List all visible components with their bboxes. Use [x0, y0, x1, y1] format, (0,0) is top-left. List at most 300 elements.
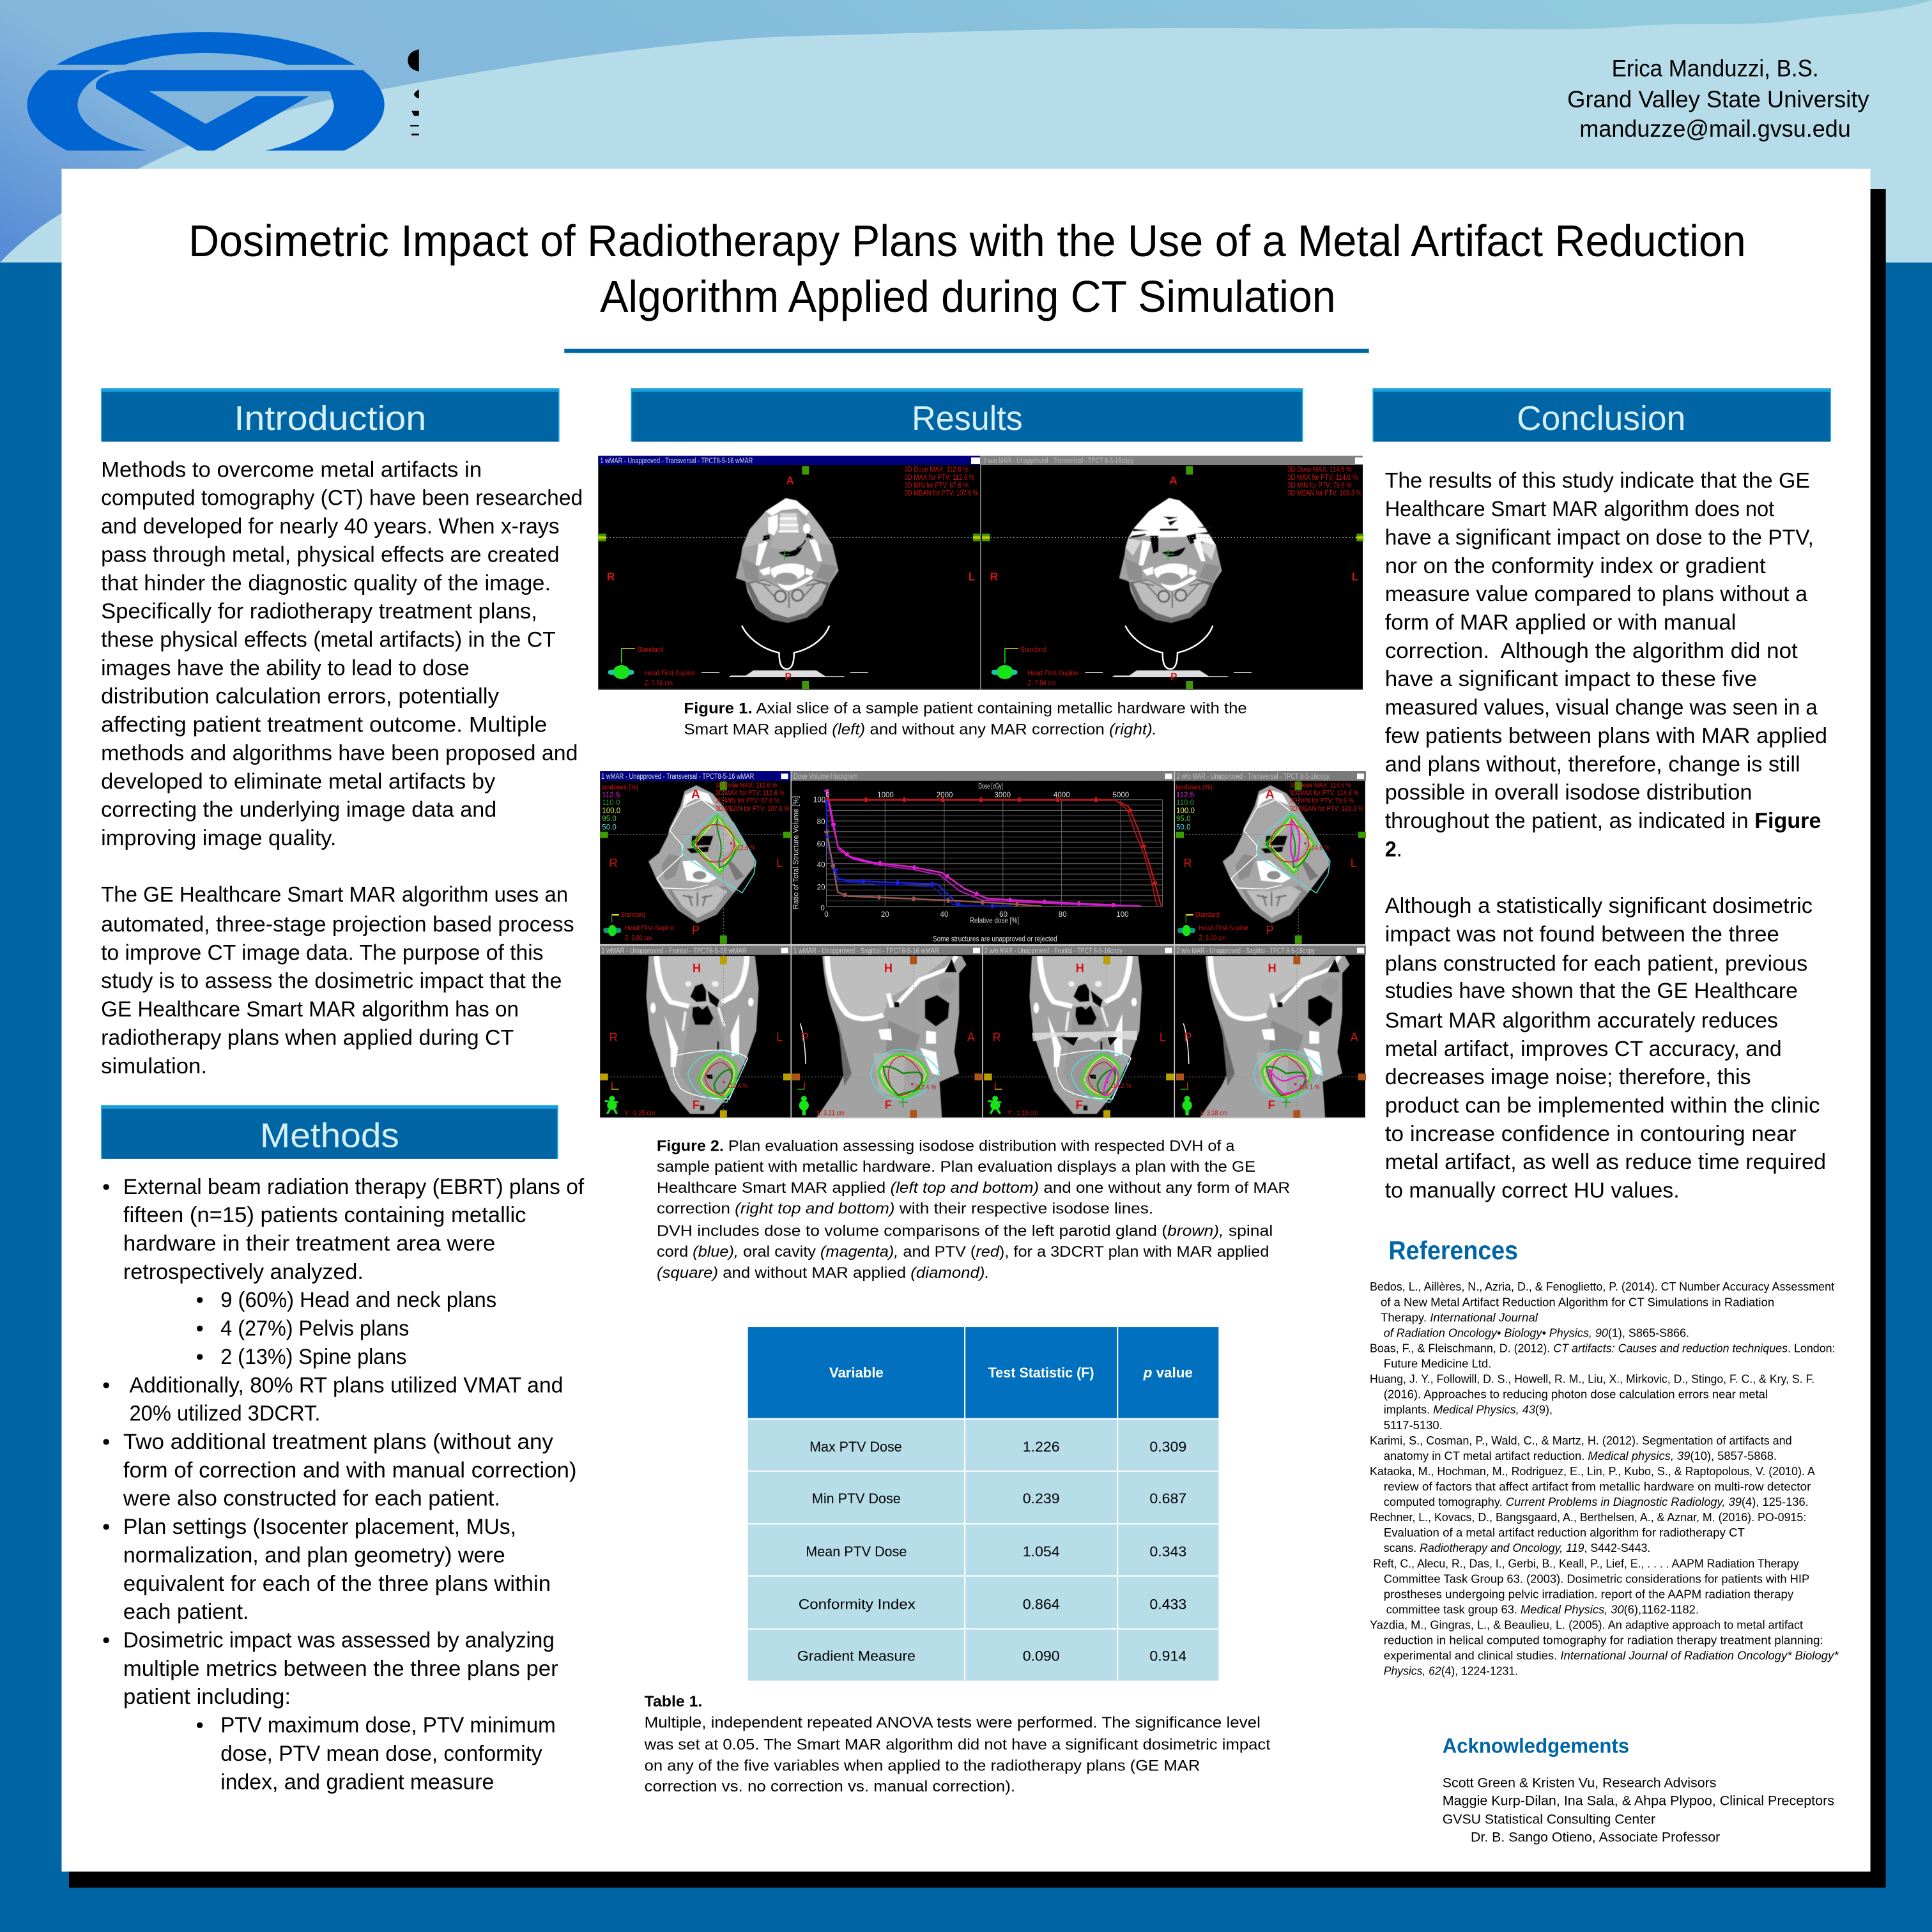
figure 2 overlay text: A [967, 1031, 976, 1044]
figure 2 title bar and axis text: 112.5 [1176, 792, 1194, 799]
heading: references: References [1389, 1236, 1518, 1265]
text block: references list: Committee Task Group 63. (2003). Dosimetric considerations for patients with HIP [1384, 1572, 1809, 1585]
text block: conclusion paragraphs: nor on the conformity index or gradient [1385, 554, 1766, 578]
figure 2 title bar and axis text: 40 [940, 911, 948, 919]
table 1: ANOVA results: Conformity Index [799, 1597, 916, 1613]
caption: figure 1: Smart MAR applied (left) and without any MAR correction (right). [684, 721, 1157, 738]
caption: figure 2: cord (blue), oral cavity (magenta), and PTV ( red), for a 3DCRT plan with MAR applied [657, 1243, 1269, 1261]
figure 2 title bar and axis text: 100 [1116, 911, 1129, 919]
text block: conclusion paragraphs: have a significant impact to these five [1385, 667, 1757, 691]
text block: references list: prostheses undergoing pelvic irradiation. report of the AAPM radiation therapy [1384, 1587, 1794, 1600]
heading: conclusion: Conclusion [1517, 399, 1685, 438]
text block: references list: experimental and clinical studies. International Journal of Radiation Oncology* Biology* [1384, 1649, 1839, 1662]
author block: Grand Valley State University [1567, 86, 1869, 112]
text block: conclusion paragraphs: metal artifact, improves CT accuracy, and [1385, 1037, 1782, 1061]
figure 2 overlay text: R [610, 1031, 618, 1044]
text block: introduction paragraphs: developed to eliminate metal artifacts by [101, 769, 496, 793]
text block: introduction paragraphs: affecting patient treatment outcome. Multiple [101, 713, 547, 737]
table 1: ANOVA results: 0.343 [1149, 1544, 1186, 1560]
text block: introduction paragraphs: and developed for nearly 40 years. When x-rays [101, 514, 560, 539]
figure 2 overlay text: F [1268, 1098, 1275, 1112]
figure 2 overlay text: Head First-Supine [625, 924, 674, 932]
figure 2 title bar and axis text: 0 [825, 792, 830, 799]
figure 1 title bar text: 2 w/o MAR - Unapproved - Transversal - TPCT 8-5-16copy [983, 457, 1133, 465]
figure 1 title bar text: 1 wMAR - Unapproved - Transversal - TPCT8-5-16 wMAR [600, 457, 753, 465]
background: light swoosh [0, 0, 1932, 263]
figure 1 overlay labels: L [969, 570, 976, 583]
figure 2 overlay text: R [610, 856, 618, 870]
figure 2 title bar and axis text: 80 [1059, 911, 1067, 919]
text block: methods bullets: hardware in their treatment area were [123, 1231, 495, 1255]
figure 1 overlay labels: 3D MIN for PTV: 87.6 % [905, 482, 969, 490]
figure 2 title bar and axis text: 60 [999, 911, 1008, 919]
text block: methods bullets: equivalent for each of the three plans within [123, 1572, 551, 1596]
figure 2 overlay text: H [1268, 962, 1276, 975]
text block: introduction paragraphs: Specifically for radiotherapy treatment plans, [101, 599, 537, 624]
caption: table 1: correction vs. no correction vs. manual correction). [645, 1778, 1015, 1795]
text block: conclusion paragraphs: form of MAR applied or with manual [1385, 610, 1736, 634]
text block: methods bullets: each patient. [123, 1600, 249, 1624]
figure 2 overlay text: L [1160, 1031, 1166, 1044]
text block: conclusion paragraphs: The results of this study indicate that the GE [1385, 469, 1810, 493]
text block: methods bullets: index, and gradient measure [220, 1770, 494, 1794]
figure 2 overlay text: 112.4 % [727, 1082, 748, 1090]
author block: manduzze@mail.gvsu.edu [1579, 116, 1851, 142]
text block: methods bullets: External beam radiation therapy (EBRT) plans of [123, 1175, 584, 1199]
text block: introduction paragraphs: automated, three-stage projection based process [101, 912, 574, 937]
text block: references list: of Radiation Oncology• Biology• Physics, 90(1), S865-S866. [1384, 1326, 1689, 1340]
text block: conclusion paragraphs: Healthcare Smart MAR algorithm does not [1385, 497, 1774, 521]
table 1: ANOVA results: 1.054 [1023, 1544, 1060, 1560]
heading: results: Results [912, 399, 1023, 438]
text block: references list: (2016). Approaches to reducing photon dose calculation errors near metal [1384, 1388, 1768, 1401]
text block: methods bullets: form of correction and with manual correction) [123, 1458, 577, 1482]
figure 2 title bar and axis text: 20 [817, 884, 825, 891]
figure 1 overlay labels: Z: 7.50 cm [645, 679, 673, 687]
caption: figure 2: Healthcare Smart MAR applied (left top and bottom) and one without any form of MAR [657, 1179, 1290, 1197]
figure 2 overlay text: H [1076, 962, 1084, 975]
text block: references list: Reft, C., Alecu, R., Das, I., Gerbi, B., Keall, P., Lief, E., . . . . AAPM Radiation Therapy [1373, 1556, 1799, 1570]
figure 1 overlay labels: R [990, 570, 999, 583]
figure 2 overlay text: A [1266, 788, 1275, 802]
figure 1 overlay labels: Head First-Supine [1027, 670, 1078, 677]
text block: conclusion paragraphs: measured values, visual change was seen in a [1385, 696, 1818, 720]
table 1: ANOVA results: Test Statistic (F) [988, 1365, 1094, 1381]
figure 1 overlay labels: 3D Dose MAX: 114.6 % [1287, 466, 1352, 474]
table 1: ANOVA results: 0.433 [1149, 1597, 1186, 1613]
text block: introduction paragraphs: Methods to overcome metal artifacts in [101, 457, 482, 482]
figure 2 overlay text: P [692, 923, 700, 937]
heading: introduction [101, 388, 560, 441]
text block: introduction paragraphs: GE Healthcare Smart MAR algorithm has on [101, 997, 519, 1022]
text block: acknowledgements: Dr. B. Sango Otieno, Associate Professor [1471, 1830, 1720, 1845]
text block: references list: Therapy. International Journal [1381, 1310, 1538, 1324]
text block: references list: review of factors that affect artifact from metallic hardware on multi-row detector [1384, 1480, 1811, 1493]
figure 2 title bar and axis text: 1 wMAR - Unapproved - Sagittal - TPCT8-5-16 wMAR [793, 947, 939, 955]
text block: references list: Boas, F., & Fleischmann, D. (2012). CT artifacts: Causes and reduction techniques. London: [1370, 1341, 1836, 1354]
left slice with MAR [736, 498, 839, 623]
text block: methods bullets: Plan settings (Isocenter placement, MUs, [123, 1515, 516, 1539]
text block: acknowledgements: Scott Green & Kristen Vu, Research Advisors [1443, 1775, 1716, 1790]
text block: methods bullets: 20% utilized 3DCRT. [129, 1402, 320, 1426]
text block: introduction paragraphs: distribution calculation errors, potentially [101, 684, 500, 709]
text block: methods bullets: Dosimetric impact was assessed by analyzing [123, 1629, 555, 1653]
text block: acknowledgements: Maggie Kurp-Dilan, Ina Sala, & Ahpa Plypoo, Clinical Preceptors [1443, 1793, 1834, 1808]
table 1: ANOVA results: 0.687 [1149, 1491, 1186, 1506]
figure 2 overlay text: L [1351, 856, 1357, 870]
figure 2 overlay text: X: 3.21 cm [816, 1109, 845, 1117]
figure 2 overlay text: Z: 3.00 cm [1199, 934, 1226, 942]
heading: acknowledgements: Acknowledgements [1443, 1733, 1629, 1757]
figure 2 title bar and axis text: 50.0 [1176, 824, 1191, 831]
text block: introduction paragraphs: simulation. [101, 1054, 207, 1078]
figure 2 overlay text: 3D MEAN for PTV: 108.3 % [1290, 805, 1363, 813]
figure 2 overlay text: F [885, 1098, 892, 1112]
text block: conclusion paragraphs: have a significant impact on dose to the PTV, [1385, 525, 1814, 549]
text block: references list: Future Medicine Ltd. [1384, 1357, 1491, 1370]
figure 2 overlay text: H [693, 962, 701, 975]
caption: figure 2: DVH includes dose to volume comparisons of the left parotid gland ( brown), spinal [657, 1222, 1273, 1239]
figure 2 overlay text: 3D MAX for PTV: 114.6 % [1290, 790, 1359, 797]
text block: methods bullets: • [196, 1317, 204, 1341]
text block: methods bullets: 2 (13%) Spine plans [220, 1345, 406, 1369]
text block: conclusion paragraphs: studies have shown that the GE Healthcare [1385, 979, 1798, 1003]
text block: introduction paragraphs [101, 457, 583, 1078]
figure 2 overlay text: R [992, 1031, 1001, 1044]
text block: introduction paragraphs: study is to assess the dosimetric impact that the [101, 969, 562, 993]
text block: introduction paragraphs: pass through metal, physical effects are created [101, 542, 560, 567]
table 1: ANOVA results: Max PTV Dose [809, 1439, 902, 1455]
figure 2 title bar and axis text: 2 w/o MAR - Unapproved - Frontal - TPCT 8-5-16copy [985, 947, 1123, 955]
text block: conclusion paragraphs: metal artifact, as well as reduce time required [1385, 1150, 1826, 1174]
figure 1 overlay labels: A [1169, 474, 1177, 487]
frontal and sagittal views without MAR [988, 956, 1350, 1118]
caption: table 1: Multiple, independent repeated ANOVA tests were performed. The significance level [645, 1714, 1261, 1731]
text block: references list: Physics, 62(4), 1224-1231. [1384, 1664, 1518, 1678]
caption: figure 2: Figure 2. Plan evaluation assessing isodose distribution with respected DVH of a [657, 1137, 1235, 1154]
figure 1 overlay labels: Standard [1020, 646, 1046, 654]
figure 2 title bar and axis text: 0 [820, 905, 825, 912]
table 1: ANOVA results: 0.090 [1023, 1648, 1060, 1664]
caption: figure 2: (square) and without MAR applied (diamond). [657, 1264, 990, 1282]
table 1: ANOVA results: Gradient Measure [797, 1648, 916, 1664]
text block: acknowledgements [1443, 1775, 1834, 1845]
text block: references list: committee task group 63. Medical Physics, 30(6),1162-1182. [1386, 1602, 1699, 1616]
text block: introduction paragraphs: images have the ability to lead to dose [101, 656, 470, 680]
table 1: ANOVA results: p value [1143, 1365, 1193, 1381]
figure 1 overlay labels: A [786, 474, 794, 487]
author block: Erica Manduzzi, B.S. [1612, 56, 1819, 82]
axial view with MAR [603, 785, 756, 936]
figure 2 overlay text: A [691, 788, 700, 802]
figure 2 overlay text: 3D MIN for PTV: 79.6 % [1290, 797, 1354, 804]
figure 2 title bar and axis text: 1000 [877, 792, 894, 799]
title: Algorithm Applied during CT Simulation [600, 272, 1336, 321]
figure 2 overlay text: L [776, 856, 783, 870]
caption: figure 2 [657, 1137, 1290, 1282]
text block: methods bullets: • [102, 1175, 110, 1199]
figure 2 title bar and axis text: 1 wMAR - Unapproved - Transversal - TPCT8-5-16 wMAR [601, 773, 754, 781]
text block: methods bullets: 4 (27%) Pelvis plans [220, 1317, 409, 1341]
figure 2 overlay text: Standard [1195, 911, 1220, 919]
heading: introduction: Introduction [234, 399, 426, 438]
table 1: ANOVA results: Mean PTV Dose [806, 1544, 907, 1560]
caption: figure 2: sample patient with metallic hardware. Plan evaluation displays a plan with the GE [657, 1158, 1255, 1176]
text block: methods bullets: • [102, 1430, 110, 1454]
text block: methods bullets: Additionally, 80% RT plans utilized VMAT and [129, 1373, 563, 1397]
figure 1 overlay labels: 3D MEAN for PTV: 107.6 % [905, 489, 978, 497]
text block: methods bullets: were also constructed for each patient. [123, 1487, 500, 1511]
figure 1 overlay labels: P [785, 672, 792, 683]
text block: conclusion paragraphs: measure value compared to plans without a [1385, 582, 1808, 606]
text block: references list: anatomy in CT metal artifact reduction. Medical physics, 39(10), 5857-5868. [1384, 1449, 1777, 1462]
table 1: ANOVA results: 0.914 [1149, 1648, 1186, 1664]
caption: figure 2: correction (right top and bottom) with their respective isodose lines. [657, 1200, 1153, 1218]
text block: methods bullets: retrospectively analyzed. [123, 1260, 364, 1284]
figure 2 title bar and axis text: 3000 [994, 792, 1011, 799]
caption: table 1: on any of the five variables when applied to the radiotherapy plans (GE MAR [645, 1757, 1200, 1774]
figure 2 overlay text: P [801, 1031, 809, 1044]
text block: conclusion paragraphs: Smart MAR algorithm accurately reduces [1385, 1008, 1778, 1032]
figure 2 title bar and axis text [601, 773, 1330, 955]
figure 2 overlay text: Y: -1.15 cm [1008, 1109, 1038, 1117]
figure 1 overlay labels: Head First-Supine [645, 670, 695, 677]
figure 2 title bar and axis text: Dose [cGy] [978, 783, 1003, 790]
text block: methods bullets: fifteen (n=15) patients containing metallic [123, 1203, 526, 1227]
figure 2 title bar and axis text: Relative dose [%] [970, 917, 1019, 924]
text block: references list: implants. Medical Physics, 43(9), [1384, 1403, 1552, 1416]
figure 2 title bar and axis text: 110.0 [1176, 799, 1194, 807]
text block: conclusion paragraphs: to manually correct HU values. [1385, 1179, 1680, 1203]
text block: methods bullets: 9 (60%) Head and neck plans [220, 1288, 496, 1312]
text block: introduction paragraphs: improving image quality. [101, 826, 336, 850]
figure 2 overlay text: F [693, 1098, 700, 1112]
figure 2 overlay text: Z: 3.00 cm [625, 934, 652, 942]
text block: methods bullets: • [196, 1288, 204, 1312]
figure 2 title bar and axis text: 100.0 [602, 807, 620, 815]
figure 2 title bar and axis text: 1 wMAR - Unapproved - Frontal - TPCT8-5-16 wMAR [601, 947, 747, 955]
text block: methods bullets: patient including: [123, 1685, 291, 1709]
couch, guides and markers [598, 457, 1364, 689]
text block: conclusion paragraphs [1385, 469, 1827, 1203]
text block: references list: 5117-5130. [1384, 1418, 1443, 1432]
axial view without MAR [1177, 785, 1330, 936]
figure 2 title bar and axis text: 2 w/o MAR - Unapproved - Transversal - TPCT 8-5-16copy [1177, 773, 1330, 781]
text block: methods bullets: • [102, 1515, 110, 1539]
text block: conclusion paragraphs: correction. Although the algorithm did not [1385, 639, 1798, 663]
figure 2 overlay text: 3D Dose MAX: 112.6 % [716, 782, 777, 790]
figure 1 overlay labels [607, 466, 1361, 687]
figure 2 overlay text: X: 3.18 cm [1199, 1109, 1228, 1117]
figure 1 overlay labels: 3D MIN for PTV: 79.6 % [1287, 482, 1352, 490]
figure 2 title bar and axis text: Dose Volume Histogram [793, 773, 857, 781]
text block: references list: Bedos, L., Aillères, N., Azria, D., & Fenoglietto, P. (2014). CT Number Accuracy Assessment [1370, 1280, 1835, 1293]
table 1: ANOVA results [748, 1327, 1218, 1681]
figure 2 title bar and axis text: 0 [824, 911, 829, 919]
figure 2 overlay text: F [1076, 1098, 1083, 1112]
figure 2 title bar and axis text: 5000 [1113, 792, 1129, 799]
heading: methods: Methods [260, 1116, 399, 1154]
figure 2 title bar and axis text: 80 [817, 818, 825, 826]
figure 1 overlay labels: L [1352, 570, 1359, 583]
table 1: ANOVA results: 0.864 [1023, 1597, 1060, 1613]
text block: references list: computed tomography. Current Problems in Diagnostic Radiology, 39(4), 125-136. [1384, 1495, 1809, 1508]
caption: figure 1: Figure 1. Axial slice of a sample patient containing metallic hardware with the [684, 700, 1247, 717]
text block: references list: reduction in helical computed tomography for radiation therapy treatment planning: [1384, 1634, 1823, 1647]
figure 2 overlay text: Isodoses (%) [1176, 783, 1213, 791]
heading: conclusion [1372, 388, 1831, 441]
author block [1567, 56, 1869, 142]
figure 2 title bar and axis text: 2 w/o MAR - Unapproved - Sagittal - TPCT 8-5-16copy [1177, 947, 1315, 955]
text block: references list: Karimi, S., Cosman, P., Wald, C., & Martz, H. (2012). Segmentation of artifacts and [1370, 1434, 1792, 1447]
figure 1 overlay labels: 3D MAX for PTV: 112.6 % [905, 474, 975, 482]
figure 2 overlay text: A [1351, 1031, 1359, 1044]
title: Dosimetric Impact of Radiotherapy Plans with the Use of a Metal Artifact Reduction [188, 216, 1746, 266]
figure 1 overlay labels: 3D MAX for PTV: 114.6 % [1287, 474, 1358, 482]
figure 2 title bar and axis text: 95.0 [1176, 815, 1191, 823]
text block: references list: scans. Radiotherapy and Oncology, 119, S442-S443. [1384, 1541, 1650, 1554]
figure 2 overlay text: H [884, 962, 893, 975]
caption: table 1 [644, 1693, 1271, 1795]
text block: references list: Yazdia, M., Gingras, L., & Beaulieu, L. (2005). An adaptive approach to metal artifact [1370, 1618, 1804, 1632]
figure 2 overlay text: 3D Dose MAX: 114.6 % [1290, 782, 1351, 790]
figure 2 title bar and axis text: Ratio of Total Structure Volume [%] [793, 796, 801, 909]
text block: conclusion paragraphs: decreases image noise; therefore, this [1385, 1065, 1751, 1089]
text block: conclusion paragraphs: 2. [1385, 837, 1402, 861]
figure 2 overlay text: Isodoses (%) [601, 783, 638, 791]
text block: introduction paragraphs: methods and algorithms have been proposed and [101, 741, 578, 765]
figure 2 overlay text: Standard [621, 911, 645, 919]
text block: methods bullets: • [102, 1373, 110, 1397]
figure 1 overlay labels: 3D MEAN for PTV: 108.3 % [1287, 489, 1361, 497]
table 1: ANOVA results: 0.309 [1149, 1439, 1186, 1455]
table 1: ANOVA results: 1.226 [1023, 1439, 1060, 1455]
text block: acknowledgements: GVSU Statistical Consulting Center [1443, 1812, 1655, 1827]
figure 2: plan evaluation [600, 771, 1366, 1118]
figure 1 overlay labels: 3D Dose MAX: 112.6 % [905, 466, 969, 474]
text block: methods bullets: PTV maximum dose, PTV minimum [220, 1713, 556, 1738]
text block: conclusion paragraphs: throughout the patient, as indicated in Figure [1385, 809, 1821, 833]
figure 2 title bar and axis text: 100.0 [1176, 807, 1195, 815]
figure 2 title bar and axis text: 60 [817, 841, 825, 848]
figure 2 overlay text [601, 782, 1363, 1117]
figure 2 overlay text: R [1183, 856, 1192, 870]
figure 2 title bar and axis text: 110.0 [602, 799, 620, 807]
text block: references list: Kataoka, M., Hochman, M., Rodriguez, E., Lin, P., Kubo, S., & Raptopolous, V. (2010). A [1370, 1464, 1815, 1478]
figure 2 overlay text: Head First-Supine [1199, 924, 1248, 932]
text block: conclusion paragraphs: Although a statistically significant dosimetric [1385, 894, 1813, 918]
figure 2 title bar and axis text: 20 [881, 911, 889, 919]
figure 2 overlay text: 114.2 % [1110, 1082, 1131, 1090]
text block: introduction paragraphs: correcting the underlying image data and [101, 798, 496, 822]
text block: references list: Evaluation of a metal artifact reduction algorithm for radiotherapy CT [1384, 1526, 1745, 1539]
figure 2 overlay text: P [1184, 1031, 1192, 1044]
figure 1 overlay labels: P [1170, 672, 1177, 683]
text block: references list: of a New Metal Artifact Reduction Algorithm for CT Simulations in Radiation [1381, 1295, 1774, 1308]
figure 2 overlay text: 112.6 % [734, 845, 755, 852]
text block: methods bullets: • [102, 1629, 110, 1653]
figure 2 title bar and axis text: 100 [813, 796, 825, 804]
figure 2 title bar and axis text: 50.0 [602, 824, 617, 831]
figure 2 overlay text: 3D MIN for PTV: 87.6 % [716, 797, 779, 804]
text block: conclusion paragraphs: and plans without, therefore, change is still [1385, 752, 1800, 776]
panel: results [598, 388, 1366, 1795]
figure 1 overlay labels: Standard [637, 646, 663, 654]
title [188, 216, 1746, 321]
figure 1 overlay labels: R [607, 570, 615, 583]
figure 2 overlay text: 3D MEAN for PTV: 107.6 % [716, 805, 790, 813]
table 1: ANOVA results: Variable [829, 1365, 884, 1381]
figure 2 title bar and axis text: 112.5 [602, 792, 620, 799]
right slice without MAR [1119, 498, 1222, 623]
text block: methods bullets: dose, PTV mean dose, conformity [220, 1742, 542, 1766]
figure 2 title bar and axis text: 95.0 [602, 815, 617, 823]
text block: conclusion paragraphs: plans constructed for each patient, previous [1385, 952, 1807, 976]
text block: introduction paragraphs: these physical effects (metal artifacts) in the CT [101, 627, 556, 652]
figure 2 overlay text: 3D MAX for PTV: 112.6 % [716, 790, 785, 797]
text block: methods bullets: • [196, 1345, 204, 1369]
text block: methods bullets: multiple metrics between the three plans per [123, 1657, 558, 1681]
figure 1 title bar text [600, 457, 1133, 465]
text block: methods bullets: normalization, and plan geometry) were [123, 1543, 505, 1567]
frontal and sagittal views with MAR [604, 956, 967, 1118]
text block: references list: Huang, J. Y., Followill, D. S., Howell, R. M., Liu, X., Mirkovic, D., Stingo, F. C., & Kry, S. F. [1370, 1372, 1814, 1386]
figure 2 overlay text: 114.1 % [1299, 1084, 1320, 1091]
panel: methods [101, 1105, 584, 1794]
text block: introduction paragraphs: radiotherapy plans when applied during CT [101, 1025, 514, 1050]
figure 2 title bar and axis text: Some structures are unapproved or rejected [933, 935, 1057, 943]
figure 2 title bar and axis text: 40 [817, 862, 825, 870]
DVH chart [826, 790, 1163, 907]
text block: methods bullets: • [196, 1713, 204, 1738]
figure 1: axial CT slices [598, 456, 1364, 690]
panel: conclusion [1372, 388, 1831, 1203]
text block: conclusion paragraphs: few patients between plans with MAR applied [1385, 724, 1827, 748]
title bars [600, 771, 1366, 1118]
text block: introduction paragraphs: computed tomography (CT) have been researched [101, 486, 583, 510]
text block: references list: Rechner, L., Kovacs, D., Bangsgaard, A., Berthelsen, A., & Aznar, M. (2016). PO-0915: [1370, 1510, 1806, 1524]
figure 2 title bar and axis text: 2000 [937, 792, 953, 799]
text block: references list [1370, 1280, 1839, 1678]
heading: methods [101, 1105, 558, 1159]
figure 1 overlay labels: Z: 7.50 cm [1027, 679, 1056, 687]
background: sky gradient band [0, 0, 1932, 263]
figure 2 overlay text: L [776, 1031, 783, 1044]
text block: introduction paragraphs: that hinder the diagnostic quality of the image. [101, 571, 551, 595]
caption: table 1: was set at 0.05. The Smart MAR algorithm did not have a significant dosimetric impact [644, 1736, 1271, 1754]
text block: methods bullets [102, 1175, 584, 1794]
figure 2 overlay text: 114.6 % [1308, 845, 1330, 852]
figure 2 overlay text: 112.4 % [915, 1084, 936, 1091]
table 1: ANOVA results: Min PTV Dose [812, 1491, 901, 1506]
text block: conclusion paragraphs: possible in overall isodose distribution [1385, 781, 1752, 805]
logo: clipped wordmark fragments [408, 49, 419, 135]
text block: introduction paragraphs: to improve CT image data. The purpose of this [101, 940, 543, 965]
figure 2 overlay text: Y: -1.25 cm [624, 1109, 655, 1117]
logo: university mark [27, 32, 385, 151]
text block: conclusion paragraphs: to increase confidence in contouring near [1385, 1122, 1797, 1146]
text block: introduction paragraphs: The GE Healthcare Smart MAR algorithm uses an [101, 883, 568, 907]
text block: methods bullets: Two additional treatment plans (without any [123, 1430, 554, 1454]
text block: conclusion paragraphs: product can be implemented within the clinic [1385, 1093, 1820, 1117]
heading: results [631, 388, 1303, 441]
table 1: ANOVA results: 0.239 [1023, 1491, 1060, 1506]
caption: table 1: Table 1. [645, 1693, 702, 1710]
caption: figure 1 [684, 700, 1247, 738]
figure 2 overlay text: P [1266, 923, 1274, 937]
figure 2 title bar and axis text: 4000 [1054, 792, 1070, 799]
panel: introduction [101, 388, 583, 1078]
